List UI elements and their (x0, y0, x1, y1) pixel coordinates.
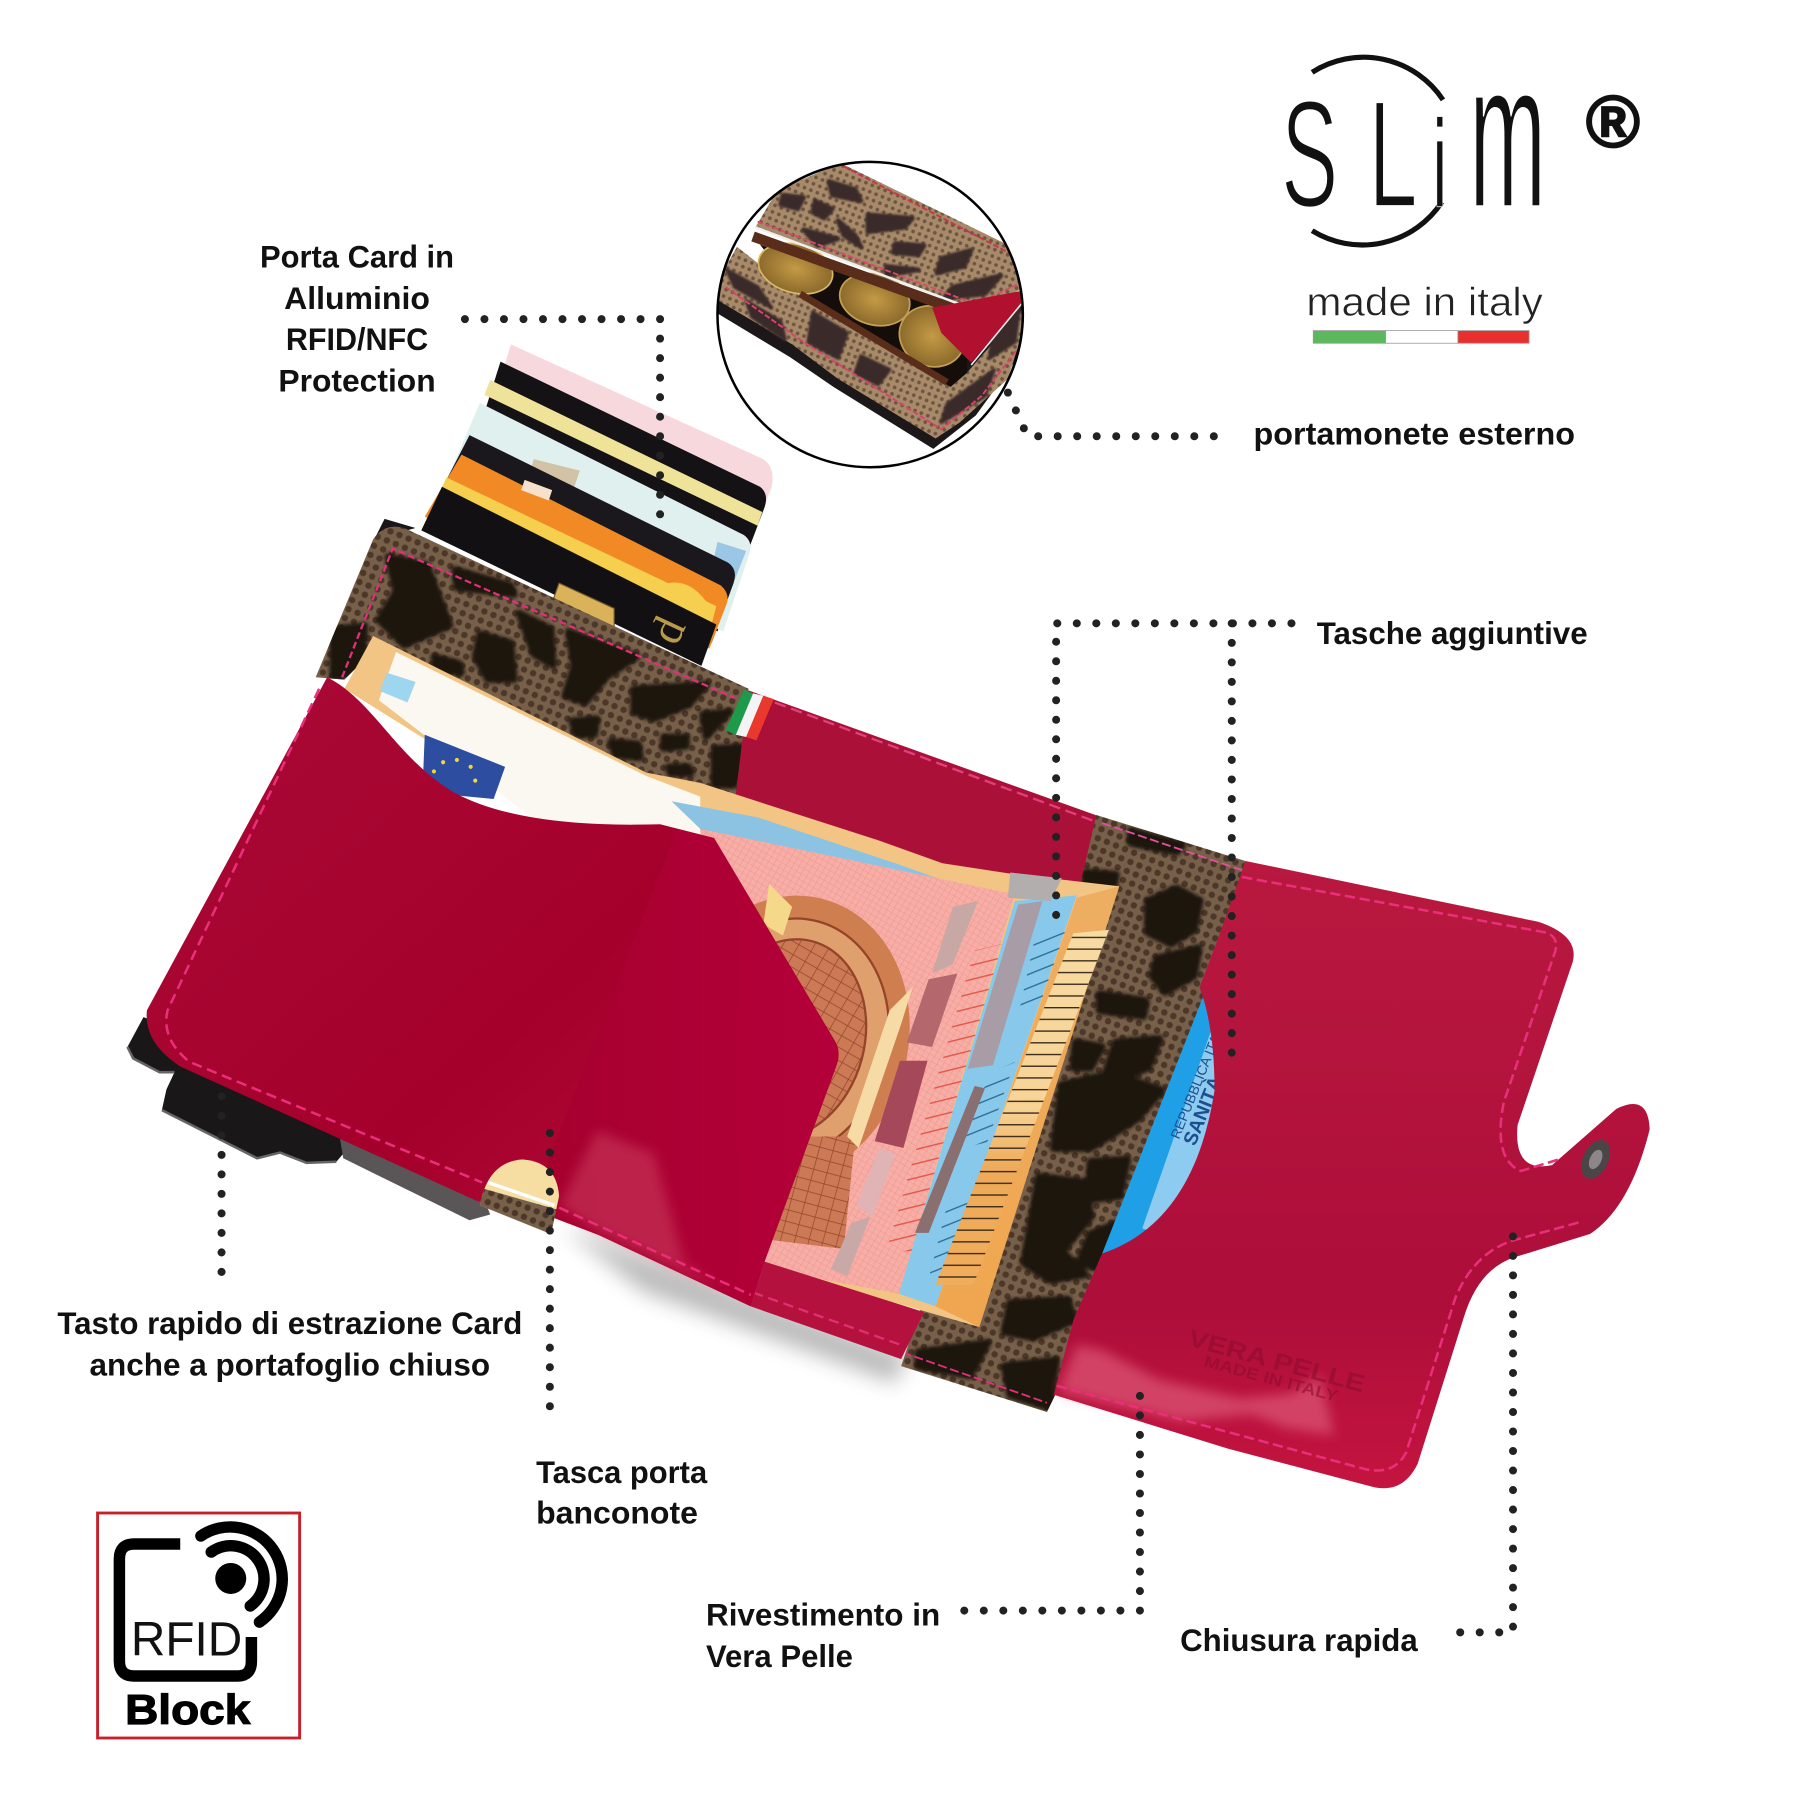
orange card (425, 455, 728, 649)
logo: Slim: i (1433, 95, 1447, 233)
black card with yellow stripe (453, 362, 766, 631)
blue health card: SANITÀ (1178, 1073, 1227, 1149)
star (763, 884, 792, 936)
logo: Slim: L (1368, 70, 1418, 240)
pink card (459, 344, 773, 643)
icon: signal waves (201, 1527, 282, 1622)
registered mark: ® (1586, 80, 1640, 163)
label: banknote pocket (536, 1454, 708, 1530)
label: extra pockets: Tasche aggiuntive (1317, 615, 1588, 651)
snap button (1575, 1135, 1616, 1184)
Block text: Block (125, 1687, 251, 1733)
embossed lettering: MADE IN ITALY (1202, 1353, 1340, 1406)
upper leopard panel (316, 518, 774, 794)
orange front note (936, 886, 1119, 1327)
european flag (422, 735, 505, 799)
embossed lettering (1185, 1325, 1368, 1406)
card letter: d (639, 609, 695, 651)
stitching: top red band (775, 703, 1096, 822)
bottom red band (751, 1262, 924, 1359)
card chip (553, 583, 614, 629)
coins (758, 242, 834, 295)
label: leather lining: Rivestimento in (706, 1597, 940, 1633)
RFID text: RFID (131, 1612, 242, 1666)
black card holder (127, 1017, 490, 1220)
label: card holder: Alluminio (284, 280, 430, 316)
callout dots: card holder (465, 319, 660, 522)
label: quick release (57, 1305, 522, 1382)
folded banknotes (344, 636, 1119, 1327)
stitching: right panel (1056, 877, 1578, 1471)
white note (379, 652, 700, 836)
lower zipper (800, 294, 947, 382)
highlight (1058, 1345, 1334, 1435)
label: card holder: RFID/NFC (286, 321, 428, 357)
label: banknote pocket: banconote (536, 1494, 698, 1530)
blue health card (1102, 997, 1215, 1254)
label: leather lining (706, 1597, 940, 1674)
security windows (907, 973, 957, 1047)
label: quick release: Tasto rapido di estrazione Card (57, 1305, 522, 1341)
light blue sticker (380, 673, 416, 703)
embossed lettering: VERA PELLE (1185, 1325, 1368, 1398)
label: quick release: anche a portafoglio chiuso (90, 1346, 490, 1382)
label: closure: Chiusura rapida (1180, 1622, 1418, 1658)
central leopard strip (901, 815, 1246, 1412)
flap shading (540, 829, 839, 1306)
italian flag tag (726, 690, 774, 740)
callout dots: quick release (218, 1096, 225, 1291)
right red panel (1054, 861, 1650, 1488)
lower leopard panel (719, 247, 1024, 439)
thumb notch (480, 1160, 559, 1232)
blue note face (899, 895, 1077, 1306)
red tick lines (886, 944, 1003, 1251)
italian flag bar (1313, 331, 1529, 343)
label: banknote pocket: Tasca porta (536, 1454, 708, 1490)
ruler ticks (936, 930, 1109, 1285)
logo: Slim: S (1281, 70, 1338, 240)
left red pocket with flap (147, 677, 839, 1306)
flap gloss (560, 1131, 723, 1291)
pink 10 euro note (700, 829, 1015, 1294)
icon: card outline (119, 1544, 251, 1676)
cream back note (344, 636, 1119, 1327)
light blue note (672, 801, 1015, 901)
stitching: left edge (166, 689, 751, 1295)
label: leather lining: Vera Pelle (706, 1638, 853, 1674)
stitching: bottom band (753, 1293, 902, 1345)
arch (754, 896, 910, 1152)
black case edge (712, 298, 1027, 449)
shadow under wallet (562, 1226, 907, 1383)
logo: Slim (1281, 19, 1546, 252)
blue tick lines (930, 932, 1065, 1274)
grey fold (968, 901, 1042, 1069)
pale band beside arch (847, 987, 913, 1148)
made in italy tagline: made in italy (1306, 280, 1543, 325)
badge: RFID Block (98, 1513, 300, 1738)
callout dots: coin pocket (1008, 393, 1228, 436)
label: card holder: Protection (278, 362, 436, 398)
red lining (932, 290, 1024, 363)
inset: coin pocket (712, 155, 1033, 476)
upper zipper (753, 236, 970, 315)
callout dots: leather (964, 1395, 1140, 1611)
open pocket interior (760, 245, 970, 387)
light blue card (436, 403, 751, 631)
label: card holder (260, 238, 454, 398)
fan of cards (421, 344, 773, 666)
callout dots: extra pockets (1056, 623, 1291, 1056)
callout dots: banknote pocket (546, 1133, 553, 1423)
logo: Slim: m (1469, 19, 1546, 252)
yellow and black card (421, 478, 716, 664)
blue health card: REPUBBLICA ITALIANA (1168, 995, 1238, 1141)
dark card (430, 435, 735, 643)
top red band (723, 689, 1102, 999)
upper leopard flap (755, 165, 1020, 302)
callout dots: closure (1460, 1223, 1513, 1632)
label: coin pocket: portamonete esterno (1254, 415, 1575, 451)
label: card holder: Porta Card in (260, 238, 454, 274)
